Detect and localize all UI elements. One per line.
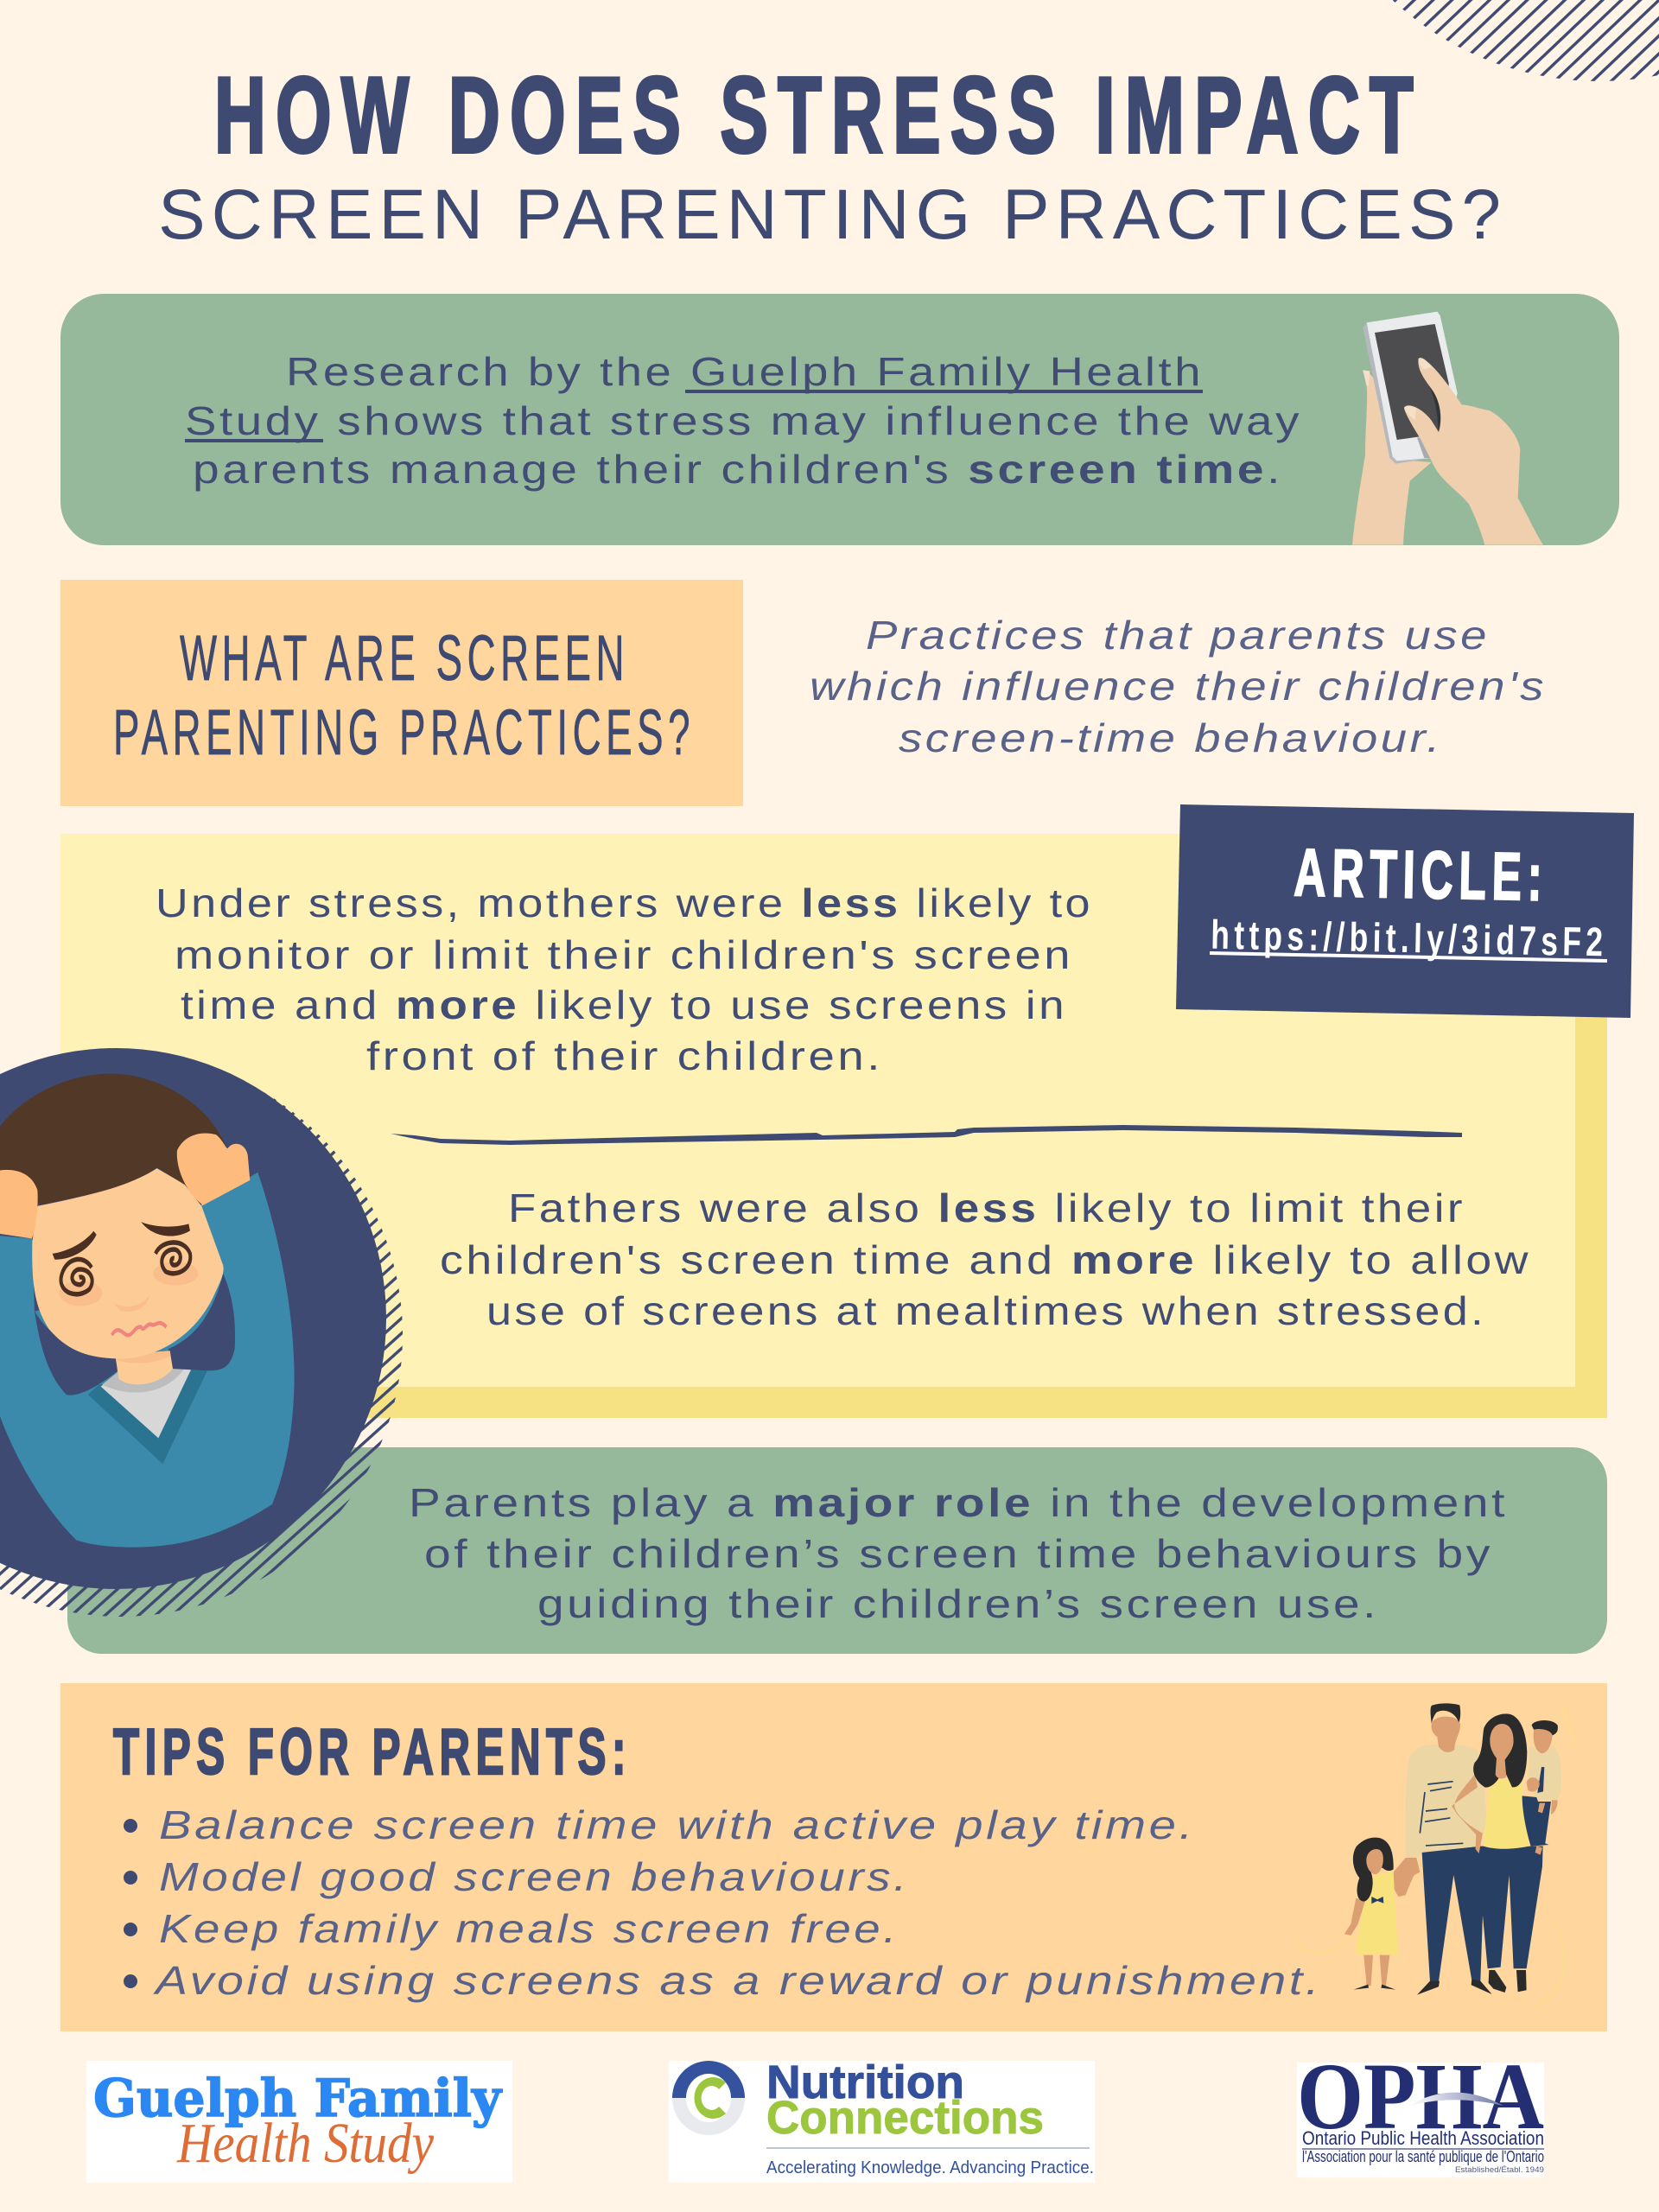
- panel: parents major role: of their children’s screen time behaviours by: [424, 1531, 1493, 1576]
- list: tips: Avoid using screens as a reward or punishment.: [152, 1958, 1322, 2003]
- panel: intro research: [60, 294, 1619, 545]
- text: mothers: Under stress, mothers were less likely to: [156, 880, 1093, 925]
- logo: Guelph Family Health Study: Guelph Family: [93, 2069, 503, 2129]
- panel: parents major role: guiding their children’s screen use.: [537, 1581, 1379, 1626]
- panel: intro research: Research by the Guelph Family Health: [286, 349, 1204, 394]
- logo: OPHA: l'Association pour la santé publique de l'Ontario: [1302, 2148, 1544, 2165]
- text: mothers: front of their children.: [366, 1033, 883, 1078]
- logo: Nutrition Connections: Nutrition: [766, 2056, 964, 2108]
- heading: tips: TIPS FOR PARENTS:: [113, 1715, 632, 1788]
- panel: parents major role: [67, 1447, 1607, 1654]
- panel shadow: yellow: [86, 864, 1607, 1418]
- logo: Nutrition Connections: Connections: [766, 2092, 1044, 2144]
- panel: mothers and fathers findings: [60, 834, 1575, 1387]
- text: fathers: [440, 1185, 1531, 1333]
- logo: OPHA: OPHA: [1297, 2044, 1544, 2149]
- callout: article link: [1176, 804, 1634, 1018]
- icon: stressed parent in circle: [0, 1048, 386, 1589]
- text: fathers: children's screen time and more likely to allow: [440, 1237, 1531, 1282]
- panel: what are screen parenting practices: [60, 580, 743, 806]
- list: tips: Model good screen behaviours.: [159, 1854, 910, 1899]
- panel: what are screen parenting practices: PARENTING PRACTICES?: [113, 696, 695, 768]
- text block: definition: screen-time behaviour.: [899, 715, 1443, 760]
- panel: intro research: parents manage their children's screen time .: [193, 447, 1283, 492]
- logo: Nutrition Connections: Accelerating Knowledge. Advancing Practice.: [766, 2158, 1094, 2177]
- text: fathers: Fathers were also less likely to limit their: [508, 1185, 1465, 1230]
- logo: Guelph Family Health Study: Health Study: [176, 2112, 435, 2175]
- icon: family: [1296, 1703, 1573, 2007]
- list: tips: Balance screen time with active play time.: [159, 1802, 1196, 1847]
- panel: tips for parents: [60, 1683, 1607, 2031]
- icon: hands holding phone: [1352, 312, 1543, 545]
- logo: OPHA: Established/Établ. 1949: [1455, 2165, 1544, 2174]
- list: tips: Keep family meals screen free.: [159, 1906, 899, 1951]
- logo: OPHA: Ontario Public Health Association: [1302, 2127, 1544, 2149]
- decorative corner hatch: [1296, 0, 1659, 81]
- panel: parents major role: Parents play a major role in the development: [409, 1480, 1508, 1525]
- panel: intro research: Study shows that stress may influence the way: [185, 398, 1302, 443]
- logo: Nutrition Connections: [669, 2056, 1095, 2183]
- text: mothers: time and more likely to use screens in: [181, 982, 1067, 1027]
- title: [158, 56, 1507, 254]
- text: mothers: [156, 880, 1093, 1078]
- panel: what are screen parenting practices: WHAT ARE SCREEN: [180, 622, 629, 694]
- decorative circle hatch: [0, 1053, 403, 1617]
- logo: Guelph Family Health Study: [86, 2061, 512, 2183]
- text block: definition: Practices that parents use: [866, 613, 1490, 658]
- text: mothers: monitor or limit their children's screen: [175, 932, 1073, 977]
- text block: definition: which influence their children's: [810, 664, 1547, 709]
- text block: definition: [810, 613, 1547, 760]
- list: tips: [124, 1802, 1322, 2003]
- text: fathers: use of screens at mealtimes when stressed.: [486, 1288, 1486, 1333]
- title: SCREEN PARENTING PRACTICES?: [158, 175, 1507, 254]
